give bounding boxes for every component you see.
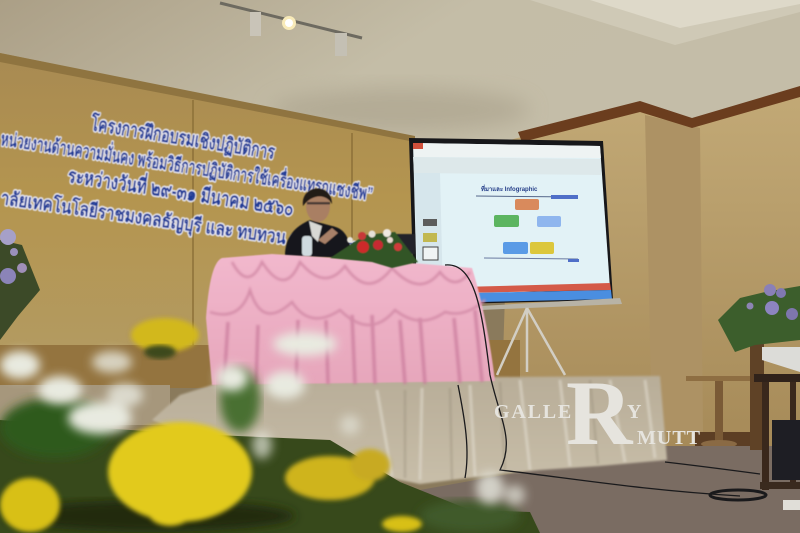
banner text: Thai project title (0, 111, 377, 263)
projector screen (409, 138, 613, 305)
watermark: Gallery RMUTT: GALLE (494, 401, 573, 423)
cables (445, 265, 766, 500)
floor (420, 446, 800, 533)
watermark: Gallery RMUTT (494, 362, 701, 464)
screen bottom case (480, 298, 622, 310)
foreground flowers (0, 318, 525, 532)
left purple flowers (0, 229, 40, 340)
foreground greenery (0, 368, 540, 533)
table flowers (330, 229, 418, 268)
banner text: Thai project title: โครงการฝึกอบรมเชิงปฏิบัติการ (89, 111, 277, 164)
blurred white flowers (0, 332, 525, 505)
blurred yellow flowers (0, 318, 422, 532)
slide content: ที่มาและ Infographic (481, 184, 538, 193)
ceiling (0, 0, 800, 150)
watermark: Gallery RMUTT: Y (627, 401, 642, 423)
gold banner backdrop (0, 53, 520, 425)
pink podium cloth (206, 254, 495, 385)
watermark: Gallery RMUTT: MUTT (637, 427, 701, 449)
slide content (476, 184, 579, 262)
right purple plant (718, 284, 800, 450)
watermark: Gallery RMUTT: R (566, 362, 634, 464)
pink swags (210, 262, 485, 325)
speaker (285, 188, 352, 258)
tripod (497, 308, 565, 375)
banner text: Thai project title: ระหว่างวันที่ ๒๙-๓๑ มีนาคม ๒๕๖๐ (66, 160, 296, 221)
right wall (500, 86, 800, 450)
white table skirt (152, 376, 667, 484)
banner text: Thai project title: าลัยเทคโนโลยีราชมงคลธัญบุรี และ ทบทวน กองสนับสนุน (0, 186, 377, 263)
projector and stand (754, 347, 800, 510)
side table (686, 376, 750, 448)
track lights (220, 3, 362, 56)
pink pleats (224, 310, 482, 384)
banner text: Thai project title: หน่วยงานด้านความมั่นคง พร้อมวิธีการปฏิบัติการใช้เครื่องแทรกแซงชีพ” (0, 125, 375, 206)
